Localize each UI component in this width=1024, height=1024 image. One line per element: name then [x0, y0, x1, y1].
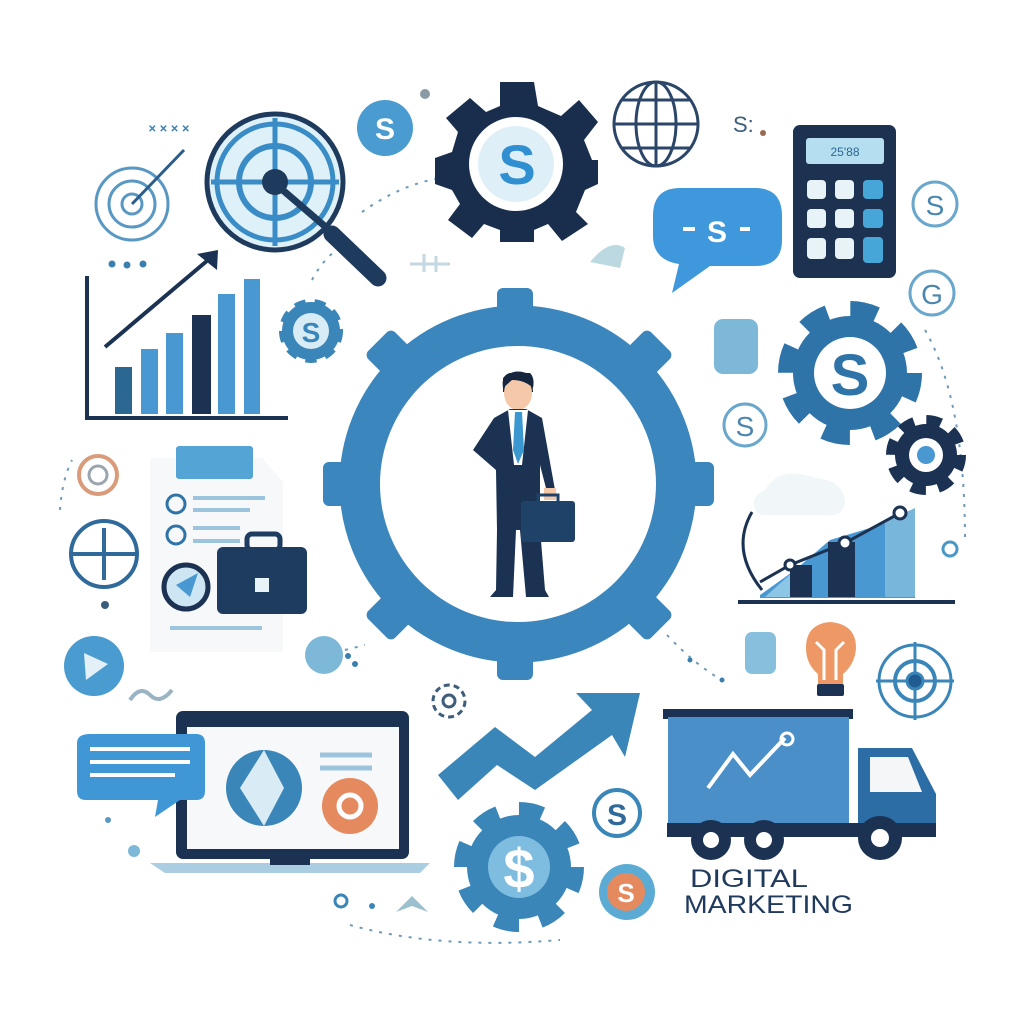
large right gear — [786, 309, 914, 437]
play coin left — [64, 636, 124, 696]
delivery truck — [663, 709, 936, 860]
orange coin left — [79, 456, 117, 494]
speech bubble with dollar — [653, 188, 782, 293]
bar chart with arrow — [87, 250, 288, 418]
speech bubble with dollar: S — [707, 216, 727, 249]
coin outlines right: S — [926, 190, 944, 221]
small blue tile lower — [305, 636, 343, 674]
light bulb — [806, 622, 856, 696]
small coin icon top — [357, 100, 413, 156]
document with briefcase — [150, 446, 307, 652]
central gear with businessman — [323, 288, 714, 680]
coin outlines right: S — [736, 411, 754, 442]
coin outlines right: G — [921, 279, 943, 310]
title: digital marketing: DIGITAL — [690, 865, 808, 893]
cloud area chart — [738, 474, 955, 602]
small gear left: S — [302, 317, 320, 348]
title: digital marketing — [684, 865, 853, 919]
crosshair left — [71, 521, 137, 587]
coin outlines right — [724, 182, 957, 446]
globe icon — [614, 82, 698, 166]
top gear with dollar: S — [498, 133, 536, 196]
small right gear — [891, 420, 961, 490]
dart target icon: ✕ ✕ ✕ ✕ — [148, 124, 190, 135]
magnifier target icon — [207, 114, 378, 278]
light blue square tile — [714, 319, 758, 374]
blue gear with dollar: $ — [503, 837, 535, 900]
small decorative specks and minor icons — [101, 89, 957, 912]
small decorative specks and minor icons: S: — [733, 112, 754, 137]
small gear left — [282, 302, 340, 360]
growth arrow — [438, 693, 640, 800]
puzzle tile lower right — [745, 632, 776, 674]
small coin icon top: S — [375, 113, 395, 146]
laptop with speech bubble — [77, 711, 430, 873]
orange coin bottom: S — [617, 878, 635, 908]
coin outline bottom — [594, 790, 640, 836]
calculator: 25'88 — [830, 145, 860, 159]
network target — [876, 642, 954, 720]
title: digital marketing: MARKETING — [684, 891, 853, 919]
businessman — [473, 371, 575, 597]
orange coin bottom — [599, 864, 655, 920]
large right gear: S — [831, 343, 869, 408]
blue gear with dollar — [461, 809, 577, 925]
calculator — [793, 125, 896, 278]
coin outline bottom: S — [607, 799, 627, 832]
top gear with dollar — [435, 82, 598, 242]
dart target icon — [96, 124, 190, 240]
small ring icon — [433, 685, 465, 717]
